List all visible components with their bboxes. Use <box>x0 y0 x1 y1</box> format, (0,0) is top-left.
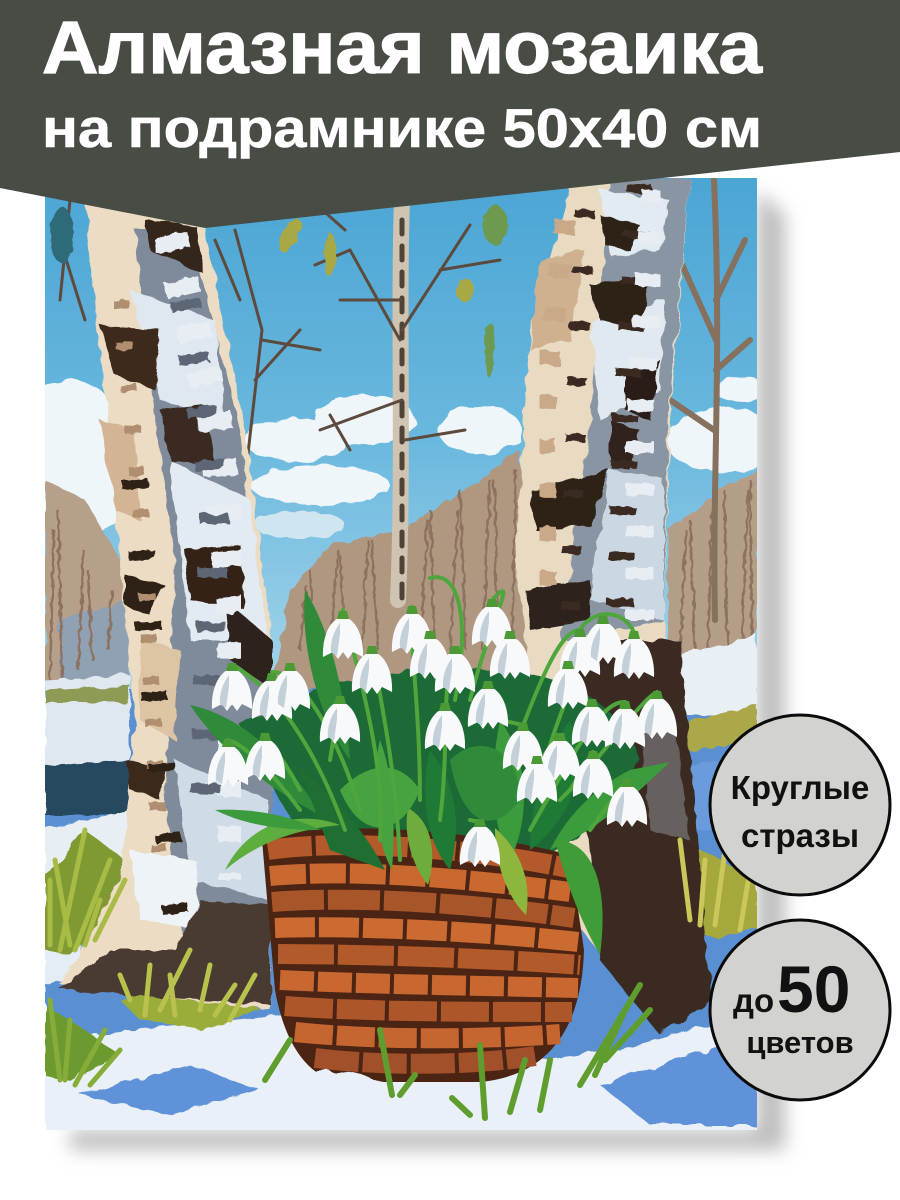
grass tuft masses <box>45 830 757 1080</box>
canvas shadow <box>70 190 785 1150</box>
left birch bark texture <box>120 235 235 960</box>
green foliage mass behind flowers <box>240 668 640 860</box>
badge: up to 50 colours: до <box>733 982 774 1019</box>
snowy ground <box>45 635 757 1140</box>
badge: round rhinestones: Круглые <box>731 769 869 806</box>
header banner <box>0 0 900 228</box>
badge: round rhinestones <box>710 715 890 895</box>
left birch trunk <box>60 200 272 1010</box>
title: Алмазная мозаика <box>42 6 763 89</box>
snow over basket foot <box>316 1068 384 1082</box>
snowdrop flowers <box>208 599 677 867</box>
painting: snowdrops in a basket among birches <box>20 178 785 1140</box>
right birch bark texture <box>545 185 655 620</box>
subtitle: на подрамнике 50х40 см <box>42 97 762 159</box>
badge: round rhinestones: стразы <box>741 817 859 854</box>
right birch trunk <box>515 178 712 1035</box>
background bare trees <box>60 180 750 620</box>
grass tufts <box>50 830 750 1085</box>
clouds <box>20 378 785 539</box>
distant bare forest <box>45 450 757 700</box>
badge: up to 50 colours: цветов <box>746 1025 854 1060</box>
foreground grass blades <box>265 985 650 1118</box>
hanging birch leaves <box>50 205 507 378</box>
sky <box>45 178 757 698</box>
badge: up to 50 colours: 50 <box>777 952 850 1026</box>
badge: up to 50 colours <box>710 920 890 1100</box>
leaves and stems <box>190 577 670 955</box>
forest twigs <box>50 470 752 680</box>
basket <box>262 828 584 1082</box>
